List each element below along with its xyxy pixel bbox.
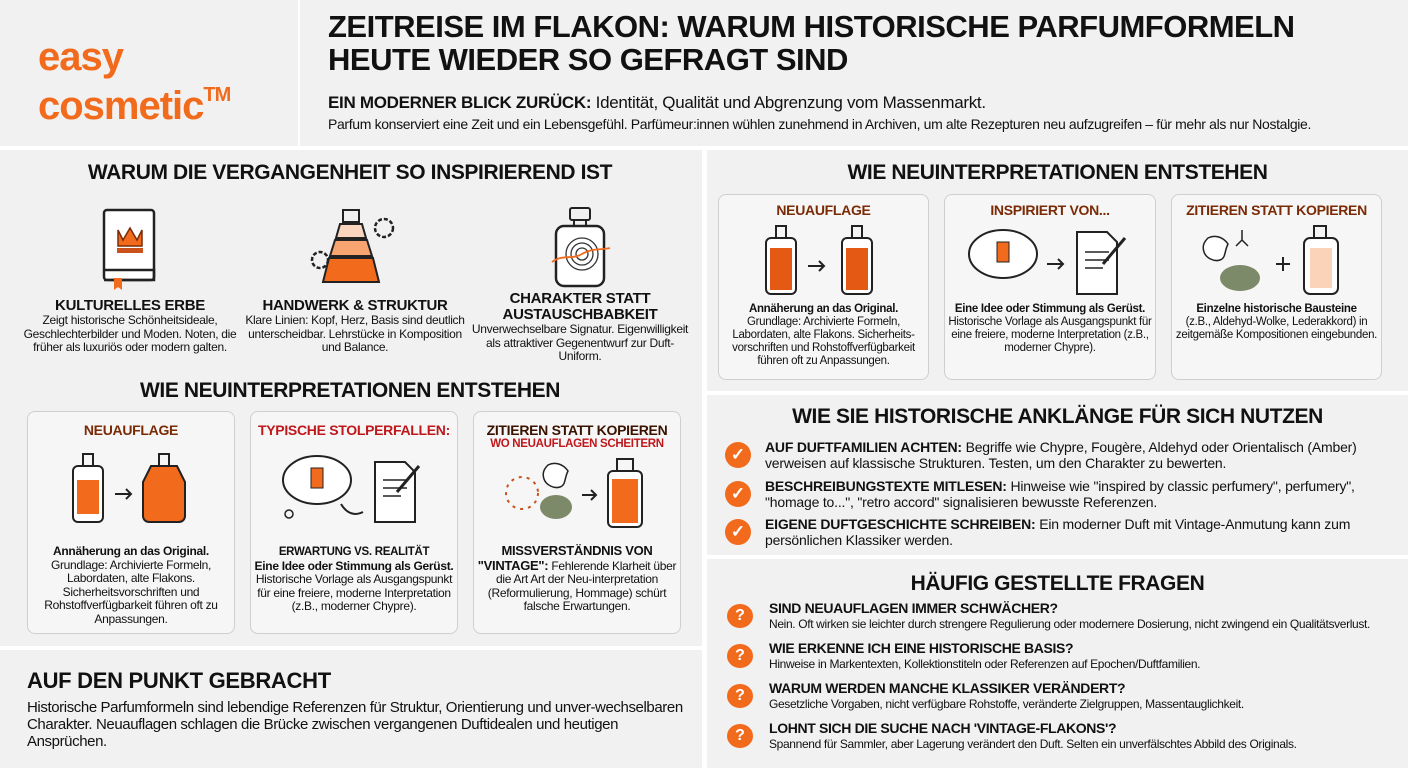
- card: typische stolperfallen: ERWARTUNG VS. REALITÄT: [279, 546, 429, 558]
- icon: bottles: [765, 225, 873, 295]
- icon: ingredients arrow bottle: [505, 458, 643, 528]
- subtitle: EIN MODERNER BLICK ZURÜCK: Identität, Qualität und Abgrenzung vom Massenmarkt.: [328, 93, 986, 112]
- card: inspiriert von: [944, 194, 1156, 380]
- card: typische stolperfallen: Eine Idee oder Stimmung als Gerüst. Historische Vorlage als Ausgangspunkt für eine freiere, moderne Interpretation (z.B., moderner Chypre).: [255, 558, 453, 613]
- faq 3: [727, 680, 1244, 711]
- icon: question bubble: ?: [735, 647, 745, 664]
- panel: logo: [0, 0, 298, 146]
- icon: question bubble: [727, 644, 753, 668]
- panel: inspiration and reinterpretation (left): AUSTAUSCHBABKEIT: [503, 306, 657, 323]
- card: neuauflage: Annäherung an das Original.: [53, 544, 209, 558]
- card: zitieren statt kopieren (left): "VINTAGE": Fehlerende Klarheit über die Art Art der Neu-interpretation (Reformulierung, Hommage) schürt falsche Erwartungen.: [478, 558, 676, 613]
- panel: faq: [707, 559, 1408, 768]
- card: typische stolperfallen: TYPISCHE STOLPERFALLEN:: [258, 422, 450, 438]
- panel: inspiration and reinterpretation (left): [0, 150, 702, 646]
- tip 2: BESCHREIBUNGSTEXTE MITLESEN: Hinweise wie "inspired by classic perfumery", perfumery", "homage to...", "retro accord" signalisieren bewusste Referenzen.: [765, 478, 1355, 510]
- icon: check: ✓: [731, 484, 745, 503]
- card: zitieren statt kopieren (right): (z.B., Aldehyd-Wolke, Lederakkord) in zeitgemäße Kompositionen eingebunden.: [1176, 316, 1377, 341]
- tip 3: EIGENE DUFTGESCHICHTE SCHREIBEN: Ein moderner Duft mit Vintage-Anmutung kann zum persönlichen Klassiker werden.: [765, 516, 1350, 548]
- icon: question bubble: [727, 724, 753, 748]
- faq 4: Spannend für Sammler, aber Lagerung verändert den Duft. Selten ein unverfälschtes Abbild des Originals.: [769, 737, 1297, 751]
- faq 2: [727, 640, 1200, 671]
- panel: wie neuinterpretationen (right): [707, 150, 1408, 391]
- logo: easy: [38, 35, 123, 79]
- heading: faq: HÄUFIG GESTELLTE FRAGEN: [911, 572, 1204, 595]
- item: handwerk struktur: [245, 209, 465, 354]
- panel: historische anklänge nutzen: [707, 395, 1408, 555]
- card: inspiriert von: INSPIRIERT VON...: [990, 202, 1110, 218]
- icon: question bubble: ?: [735, 727, 745, 744]
- panel: inspiration and reinterpretation (left): HANDWERK & STRUKTUR: [262, 297, 448, 314]
- card: neuauflage (right): Annäherung an das Original.: [749, 303, 898, 315]
- panel: auf den punkt gebracht: [0, 650, 702, 768]
- card: zitieren statt kopieren (left): WO NEUAUFLAGEN SCHEITERN: [490, 438, 664, 450]
- panel: inspiration and reinterpretation (left): Klare Linien: Kopf, Herz, Basis sind deutlich unterscheidbar. Lehrstücke in Komposition und Balance.: [245, 313, 465, 354]
- faq 3: Gesetzliche Vorgaben, nicht verfügbare Rohstoffe, veränderte Zielgruppen, Massentauglichkeit.: [769, 697, 1244, 711]
- card: inspiriert von: Eine Idee oder Stimmung als Gerüst. Historische Vorlage als Ausgangspunkt für eine freiere, moderne Interpretation (z.B., moderner Chypre).: [948, 303, 1152, 354]
- card: neuauflage (right): [718, 194, 929, 380]
- icon: thought cloud and document: [282, 455, 420, 523]
- title: ZEITREISE IM FLAKON: WARUM HISTORISCHE PARFUMFORMELN: [328, 9, 1295, 44]
- intro text: Parfum konserviert eine Zeit und ein Lebensgefühl. Parfümeur:innen wühlen zunehmend in Archiven, um alte Rezepturen neu aufzugreifen – für mehr als nur Nostalgie.: [328, 116, 1311, 132]
- faq 4: LOHNT SICH DIE SUCHE NACH 'VINTAGE-FLAKONS'?: [769, 720, 1116, 736]
- icon: check: [725, 481, 751, 507]
- item: charakter statt austauschbarkeit: [472, 207, 688, 363]
- summary text: Historische Parfumformeln sind lebendige Referenzen für Struktur, Orientierung und unver-wechselbaren Charakter. Neuauflagen schlagen die Brücke zwischen vergangenen Duftidealen und heutigen Ansprüchen.: [27, 699, 683, 750]
- icon: question bubble: ?: [735, 607, 745, 624]
- icon: question bubble: [727, 684, 753, 708]
- heading: warum vergangenheit: WARUM DIE VERGANGENHEIT SO INSPIRIEREND IST: [88, 161, 612, 184]
- card: zitieren statt kopieren (left): ZITIEREN STATT KOPIEREN: [487, 422, 667, 438]
- heading: wie neuinterpretationen (left): WIE NEUINTERPRETATIONEN ENTSTEHEN: [140, 379, 560, 402]
- faq 2: WIE ERKENNE ICH EINE HISTORISCHE BASIS?: [769, 640, 1073, 656]
- icon: book with crown: [102, 208, 156, 290]
- icon: pyramid with gears: [310, 209, 394, 283]
- logo: [38, 35, 230, 128]
- card: neuauflage (right): NEUAUFLAGE: [776, 202, 871, 218]
- icon: check: ✓: [731, 445, 745, 464]
- title: [328, 9, 1295, 77]
- faq 1: SIND NEUAUFLAGEN IMMER SCHWÄCHER?: [769, 600, 1058, 616]
- icon: check: [725, 519, 751, 545]
- icon: question bubble: [727, 604, 753, 628]
- panel: header: [300, 0, 1408, 146]
- icon: question bubble: ?: [735, 687, 745, 704]
- heading: wie neuinterpretationen (right): WIE NEUINTERPRETATIONEN ENTSTEHEN: [847, 161, 1268, 184]
- icon: ingredients plus bottle: [1202, 225, 1339, 295]
- faq 2: Hinweise in Markentexten, Kollektionstiteln oder Referenzen auf Epochen/Duftfamilien.: [769, 657, 1200, 671]
- panel: inspiration and reinterpretation (left): Zeigt historische Schönheitsideale, Geschlechterbilder und Moden. Noten, die früher als luxuriös oder modern galten.: [24, 313, 236, 354]
- icon: check: ✓: [731, 522, 745, 541]
- card: zitieren statt kopieren (left): [473, 411, 681, 634]
- faq 1: [727, 600, 1370, 631]
- heading: auf den punkt: AUF DEN PUNKT GEBRACHT: [27, 668, 331, 693]
- tip 1: AUF DUFTFAMILIEN ACHTEN: Begriffe wie Chypre, Fougère, Aldehyd oder Orientalisch (Amber) verweisen auf klassische Strukturen. Testen, um den Charakter zu bewerten.: [765, 439, 1357, 471]
- faq 3: WARUM WERDEN MANCHE KLASSIKER VERÄNDERT?: [769, 680, 1125, 696]
- icon: bottle with fingerprint: [552, 207, 610, 288]
- heading: anklänge nutzen: WIE SIE HISTORISCHE ANKLÄNGE FÜR SICH NUTZEN: [792, 405, 1323, 428]
- panel: inspiration and reinterpretation (left): CHARAKTER STATT: [510, 290, 650, 307]
- logo: cosmeticTM: [38, 84, 230, 128]
- panel: inspiration and reinterpretation (left): Unverwechselbare Signatur. Eigenwilligkeit als attraktiver Gegenentwurf zur Duft-Uniform.: [472, 322, 688, 363]
- faq 4: [727, 720, 1297, 751]
- panel: inspiration and reinterpretation (left): KULTURELLES ERBE: [55, 297, 205, 314]
- card: zitieren statt kopieren (left): MISSVERSTÄNDNIS VON: [501, 543, 653, 558]
- card: typische stolperfallen: [250, 411, 458, 634]
- icon: cloud and document: [968, 229, 1126, 295]
- title: HEUTE WIEDER SO GEFRAGT SIND: [328, 42, 848, 77]
- faq 1: Nein. Oft wirken sie leichter durch strengere Regulierung oder modernere Dosierung, nicht zwingend ein Qualitätsverlust.: [769, 617, 1370, 631]
- card: zitieren statt kopieren (right): Einzelne historische Bausteine: [1196, 303, 1357, 315]
- card: zitieren statt kopieren (right): [1171, 194, 1382, 380]
- card: neuauflage: Grundlage: Archivierte Formeln, Labordaten, alte Flakons. Sicherheitsvorschriften und Rohstoffverfügbarkeit führen oft zu Anpassungen.: [44, 558, 218, 626]
- card: neuauflage: [27, 411, 235, 634]
- icon: check: [725, 442, 751, 468]
- card: zitieren statt kopieren (right): ZITIEREN STATT KOPIEREN: [1186, 202, 1367, 218]
- item: kulturelles erbe: [24, 208, 236, 354]
- card: neuauflage (right): Grundlage: Archivierte Formeln, Labordaten, alte Flakons. Sicherheits-vorschriften und Rohstoffverfügbarkeit führen oft zu Anpassungen.: [732, 316, 915, 367]
- icon: bottle arrow bottle: [72, 453, 186, 523]
- card: neuauflage: NEUAUFLAGE: [84, 422, 178, 438]
